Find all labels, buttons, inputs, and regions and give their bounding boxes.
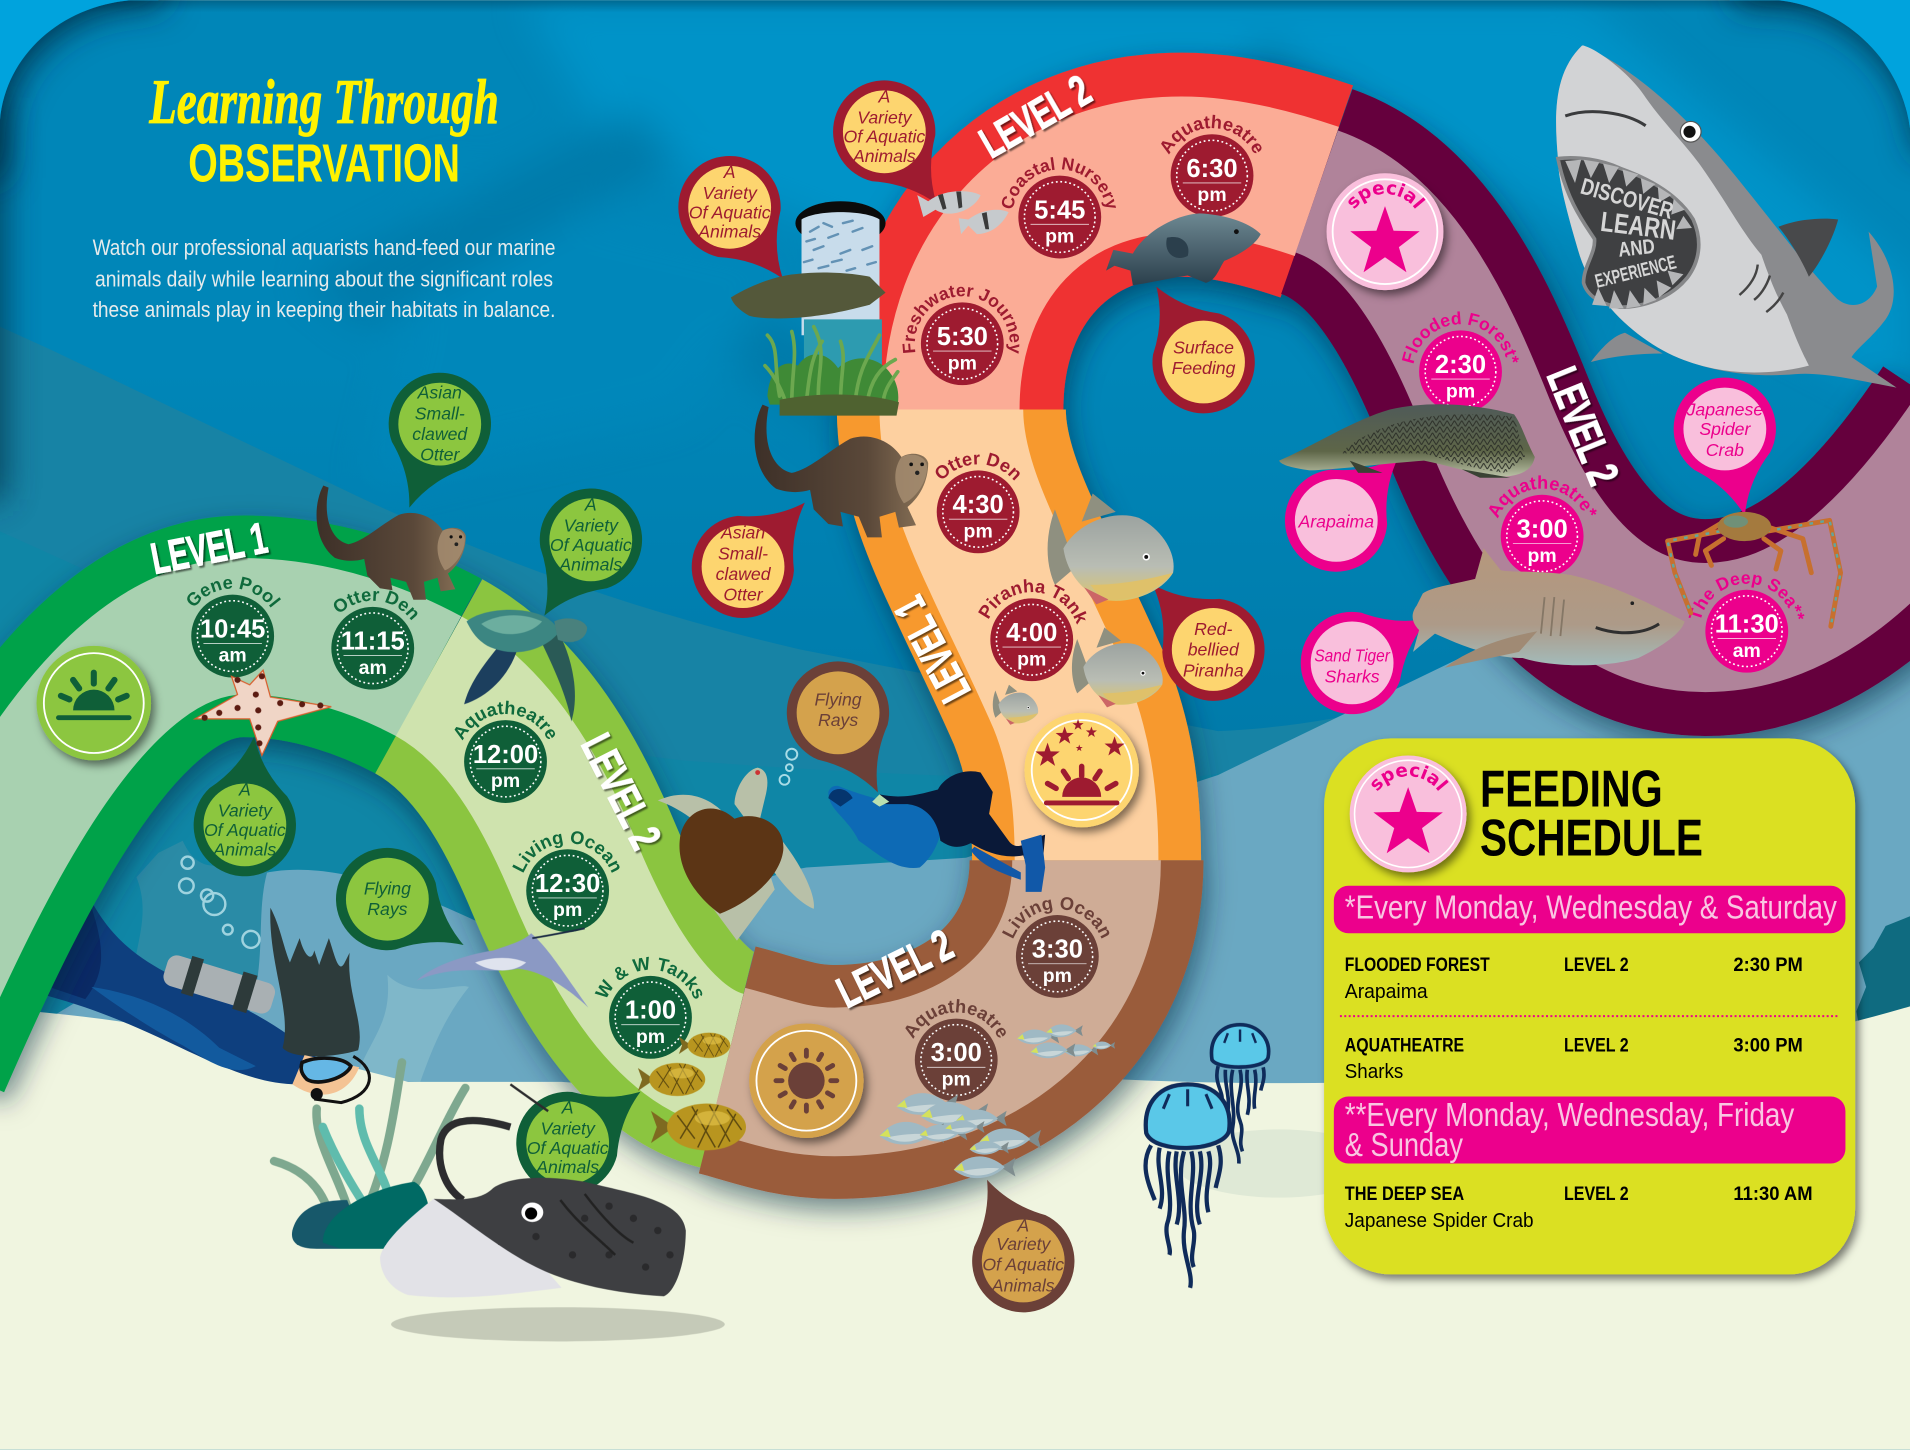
section: level 2 light green strip (429, 676, 727, 1060)
pink bar: Monday Wednesday Friday Sunday: **Every Monday, Wednesday, Friday (1345, 1096, 1795, 1133)
aquarium tube (765, 201, 899, 416)
intro text: Watch our professional aquarists hand-feed our marine (93, 235, 555, 260)
callout: variety near starfish: Of Aquatic (204, 820, 286, 840)
callout: variety top: A (877, 87, 890, 107)
section: level 1 green strip (0, 626, 429, 1048)
cartoon shark: AND (1617, 235, 1656, 262)
stingray (380, 1084, 686, 1297)
badge 12:30 (512, 831, 620, 932)
callout: variety near turtle: A (584, 495, 597, 515)
row: the deep sea (1345, 1183, 1813, 1232)
badge 12:00 (454, 700, 556, 803)
callout: variety top: Animals (852, 146, 916, 166)
badge 2:30: Flooded Forest* (1402, 311, 1519, 364)
callout: flying rays brown: Flying (815, 690, 862, 710)
badge 6:30: pm (1197, 184, 1227, 206)
level labels: LEVEL 2 (571, 726, 670, 857)
pale band: light green (429, 676, 727, 1060)
level labels: LEVEL 2 (972, 66, 1099, 168)
badge 11:15: 11:15 (341, 627, 405, 655)
row: the deep sea: 11:30 AM (1733, 1183, 1813, 1205)
callout: variety top (813, 60, 978, 234)
callout: surface feeding: Feeding (1172, 358, 1236, 378)
level labels: LEVEL 2 (1537, 360, 1628, 492)
badge 3:00 special: 3:00 (1517, 515, 1568, 543)
catfish (731, 272, 886, 318)
pale band: orange (951, 410, 1087, 860)
callout: variety near gold fish: Variety (540, 1118, 596, 1138)
callout: variety tube: Of Aquatic (689, 202, 771, 222)
bubbles near turtle (780, 749, 797, 785)
badge 10:45: am (219, 645, 247, 667)
icon: sunset with stars (1024, 713, 1139, 827)
badge 4:00: Piranha Tank (978, 579, 1086, 624)
badge 5:30 (902, 286, 1020, 386)
row: flooded forest: 2:30 PM (1733, 954, 1803, 976)
badge 5:30: 5:30 (937, 323, 988, 351)
callout: sand tiger sharks: Sand Tiger (1314, 646, 1391, 666)
badge 3:30: pm (1043, 965, 1072, 987)
callout: arapaima (1264, 421, 1435, 593)
pale band: red (951, 165, 1317, 410)
cartoon shark (1556, 45, 1897, 388)
callout: variety near starfish: Animals (212, 839, 276, 859)
row: the deep sea: LEVEL 2 (1564, 1183, 1629, 1205)
left arch: cartoon diver (30, 883, 369, 1103)
title: Learning Through: Learning Through (149, 67, 499, 137)
seaweed inside arch (133, 841, 469, 1082)
badge 3:00 special (1489, 475, 1597, 574)
icon: sunrise (37, 646, 151, 760)
ground shadow under stingray (391, 1307, 725, 1341)
corner top left (0, 0, 158, 171)
callout: variety near starfish: Variety (218, 800, 273, 820)
row: aquatheatre: Sharks (1345, 1060, 1403, 1083)
wave layer: teal upper (0, 327, 1910, 1450)
silver fish school lower (879, 1093, 1041, 1178)
seaweed right (1856, 916, 1910, 1055)
row: aquatheatre (1345, 1034, 1803, 1083)
row: flooded forest (1345, 954, 1803, 1003)
callouts: red (658, 60, 1286, 722)
badge 3:00 special: Aquatheatre* (1489, 475, 1597, 518)
callout: variety tube: Animals (697, 222, 761, 242)
section: level 2 purple strip (1317, 191, 1910, 628)
badge 1:00: 1:00 (625, 997, 676, 1025)
callout: red-bellied piranha: Piranha (1183, 660, 1244, 680)
otter level 1 (317, 486, 466, 600)
callout: flying rays brown: Rays (818, 710, 858, 730)
otter level 1 orange (755, 405, 928, 537)
icon: special star in panel: special (1372, 765, 1449, 791)
callouts: pink (1264, 367, 1795, 733)
callout: variety near gold fish: Animals (535, 1157, 599, 1177)
callout: red-bellied piranha (1115, 550, 1286, 722)
callout: variety near starfish: A (238, 780, 251, 800)
callout: otter red: Otter (723, 585, 764, 605)
pale band: brown (727, 860, 1087, 1082)
badge 11:15: am (359, 657, 387, 679)
section: level 2 brown strip (727, 860, 1087, 1082)
jellyfish small (1211, 1025, 1269, 1164)
callout: variety near gold fish: Of Aquatic (527, 1138, 609, 1158)
arapaima (1279, 404, 1535, 478)
time badges: level 1 green morning (142, 574, 702, 1059)
badge 4:30 (936, 452, 1020, 554)
badge 1:00 (594, 956, 702, 1059)
badge 6:30: 6:30 (1186, 155, 1238, 183)
time badges: pink special (1358, 311, 1804, 713)
pink bar: Monday Wednesday Friday Sunday (1334, 1096, 1845, 1164)
icon: special star in panel (1348, 754, 1476, 883)
cartoon shark: EXPERIENCE (1593, 251, 1679, 293)
panel heading: FEEDING (1480, 761, 1663, 819)
title: OBSERVATION: OBSERVATION (188, 134, 460, 194)
row: flooded forest: Arapaima (1345, 980, 1428, 1003)
badge 3:30: Living Ocean (1002, 897, 1110, 938)
callout: variety brown: A (1016, 1216, 1029, 1236)
callouts: green (189, 358, 670, 1214)
callout: sand tiger sharks (1282, 574, 1455, 733)
sea turtle (464, 610, 587, 721)
badge 5:30: Freshwater Journey (902, 286, 1020, 354)
callout: variety near starfish (189, 731, 305, 881)
S-shaped route ribbon (0, 165, 1910, 1082)
badge 1:00: pm (636, 1026, 665, 1048)
callout: japanese spider crab: Crab (1706, 440, 1744, 460)
callout: otter red: Small- (718, 543, 768, 563)
badge 4:00: pm (1017, 648, 1046, 670)
callout: japanese spider crab: Japanese (1686, 400, 1763, 420)
level labels: LEVEL 1 (885, 588, 980, 710)
time badges: level 2 brown afternoon (905, 897, 1110, 1102)
callout: variety brown: Variety (996, 1234, 1052, 1254)
callout: asian small-clawed otter: clawed (412, 424, 468, 444)
badge 3:30 (1002, 897, 1110, 998)
feeding schedule panel: SCHEDULE (1480, 809, 1703, 867)
sand tiger shark (1413, 548, 1685, 668)
callout: japanese spider crab (1663, 367, 1795, 527)
shark mouth (1558, 158, 1699, 307)
callout: variety brown: Of Aquatic (982, 1255, 1064, 1275)
callout: variety near turtle (501, 469, 661, 642)
gold pineapple fish (638, 1033, 746, 1150)
callout: flying rays: Rays (367, 899, 408, 919)
callout: variety brown (940, 1159, 1091, 1329)
badge 12:00: pm (491, 770, 520, 792)
callout: red-bellied piranha: Red- (1194, 619, 1232, 639)
piranha large (1048, 494, 1174, 604)
callout: arapaima: Arapaima (1297, 512, 1374, 532)
cartoon shark: LEARN (1599, 206, 1678, 246)
callout: otter red (671, 467, 842, 639)
callout: otter red: clawed (716, 564, 772, 584)
callout: flying rays: Flying (364, 878, 411, 898)
badge 12:00: Aquatheatre (454, 700, 556, 740)
feeding schedule panel (1322, 738, 1865, 1286)
callout: japanese spider crab: Spider (1699, 419, 1751, 439)
badge 4:30: pm (964, 520, 993, 542)
intro text: these animals play in keeping their habitats in balance. (93, 297, 555, 322)
badge 6:30 (1161, 114, 1262, 216)
pale band: green (0, 626, 429, 1048)
wave layer: pale blue (0, 445, 1910, 1450)
callout: variety tube (658, 136, 824, 309)
badge 5:45: pm (1045, 226, 1074, 248)
callout: variety near turtle: Animals (558, 554, 622, 574)
badge 1:00: W & W Tanks (594, 956, 702, 999)
pink bar: Monday Wednesday Saturday (1334, 886, 1845, 933)
callout: asian small-clawed otter: Asian (417, 383, 462, 403)
callout: asian small-clawed otter: Otter (420, 445, 460, 465)
badge 12:00: 12:00 (473, 741, 538, 769)
badge 12:30: 12:30 (535, 870, 600, 898)
badge 10:45 (187, 576, 281, 678)
level labels: LEVEL 1 (147, 514, 271, 584)
badge 3:30: 3:30 (1032, 936, 1083, 964)
cartoon shark: DISCOVER (1578, 173, 1677, 224)
callout: variety tube: A (723, 162, 736, 182)
manta ray (417, 928, 588, 1008)
badge 11:30: The Deep Sea** (1688, 574, 1804, 620)
callout: asian small-clawed otter: Small- (415, 403, 465, 423)
callout: surface feeding (1113, 259, 1274, 433)
intro text: animals daily while learning about the significant roles (95, 266, 553, 291)
bubbles (179, 857, 259, 948)
badge 4:00: 4:00 (1006, 619, 1057, 647)
badge 12:30: pm (553, 899, 582, 921)
pink bar: Monday Wednesday Friday Sunday: & Sunday (1345, 1126, 1463, 1163)
callout: variety brown: Animals (991, 1275, 1055, 1295)
shark teeth (1565, 160, 1692, 308)
badge 11:15: Otter Den (334, 590, 418, 620)
row: aquatheatre: AQUATHEATRE (1345, 1034, 1464, 1056)
callout: surface feeding: Surface (1173, 337, 1234, 357)
badge 11:30: am (1733, 640, 1761, 662)
jellyfish large (1146, 1084, 1230, 1288)
callout: red-bellied piranha: bellied (1188, 640, 1240, 660)
icon: midday sun (749, 1023, 864, 1138)
piranha medium (1072, 628, 1163, 707)
pale band: purple (1317, 191, 1910, 628)
badge 3:00: Aquatheatre (905, 999, 1006, 1039)
badge 3:00: 3:00 (931, 1039, 982, 1067)
badge 5:45 (1002, 157, 1116, 258)
row: the deep sea: THE DEEP SEA (1345, 1183, 1464, 1205)
callout: asian small-clawed otter (361, 358, 505, 525)
badge 2:30 (1402, 311, 1519, 408)
time badges: red evening (858, 114, 1308, 722)
badge 2:30: pm (1446, 380, 1475, 402)
row: aquatheatre: 3:00 PM (1733, 1034, 1803, 1056)
callout: variety top: Variety (857, 107, 913, 127)
cartoon turtle (658, 768, 814, 941)
real diver with ray (828, 771, 1045, 892)
icon: special star (1324, 172, 1452, 300)
callouts: brown (769, 644, 1091, 1329)
badge 5:45: 5:45 (1034, 196, 1085, 224)
badge 11:15 (331, 590, 418, 690)
grouper (1106, 213, 1261, 285)
wave layer: teal mid (0, 512, 1910, 1450)
callout: variety tube: Variety (703, 183, 758, 203)
badge 11:30: 11:30 (1715, 610, 1779, 638)
sand floor (0, 1006, 1910, 1450)
badge 5:45: Coastal Nursery (1002, 157, 1116, 208)
badge 10:45: 10:45 (200, 615, 265, 643)
callout: variety near turtle: Of Aquatic (550, 535, 632, 555)
silver fish school upper (1017, 1024, 1115, 1058)
row: aquatheatre: LEVEL 2 (1564, 1034, 1629, 1056)
badge 6:30: Aquatheatre (1161, 114, 1262, 154)
level labels: LEVEL 2 (830, 920, 961, 1018)
badge 11:30 (1688, 574, 1804, 673)
icon: special star: special (1348, 183, 1426, 209)
callout: variety near gold fish (496, 1050, 670, 1214)
section: level 1 orange strip (951, 410, 1087, 860)
callout: flying rays brown (769, 644, 924, 815)
badge 4:30: Otter Den (936, 452, 1020, 480)
badge 3:00: pm (942, 1069, 971, 1091)
badge 12:30: Living Ocean (512, 831, 620, 873)
section: level 2 red strip (951, 165, 1317, 410)
callout: variety top: Of Aquatic (843, 127, 925, 147)
badge 3:00 special: pm (1528, 545, 1557, 567)
corner top right (1730, 0, 1910, 146)
callout: flying rays (317, 829, 490, 989)
row: the deep sea: Japanese Spider Crab (1345, 1209, 1534, 1232)
row: flooded forest: LEVEL 2 (1564, 954, 1629, 976)
starfish (195, 670, 331, 755)
spider crab (1668, 512, 1841, 626)
row: flooded forest: FLOODED FOREST (1345, 954, 1490, 976)
callout: variety near gold fish: A (561, 1098, 574, 1118)
level labels (147, 66, 1628, 1018)
archer fish (917, 191, 1009, 234)
badge 4:30: 4:30 (953, 491, 1004, 519)
piranha small (993, 685, 1038, 725)
badge 2:30: 2:30 (1435, 351, 1486, 379)
callout: otter red: Asian (720, 523, 765, 543)
callout: sand tiger sharks: Sharks (1325, 666, 1380, 686)
callout: variety near turtle: Variety (564, 515, 619, 535)
intro text (93, 235, 555, 322)
plants and rocks (274, 1062, 465, 1249)
badge 3:00 (905, 999, 1006, 1102)
badge 4:00 (978, 579, 1086, 682)
badge 5:30: pm (948, 352, 977, 374)
badge 10:45: Gene Pool (187, 576, 281, 608)
